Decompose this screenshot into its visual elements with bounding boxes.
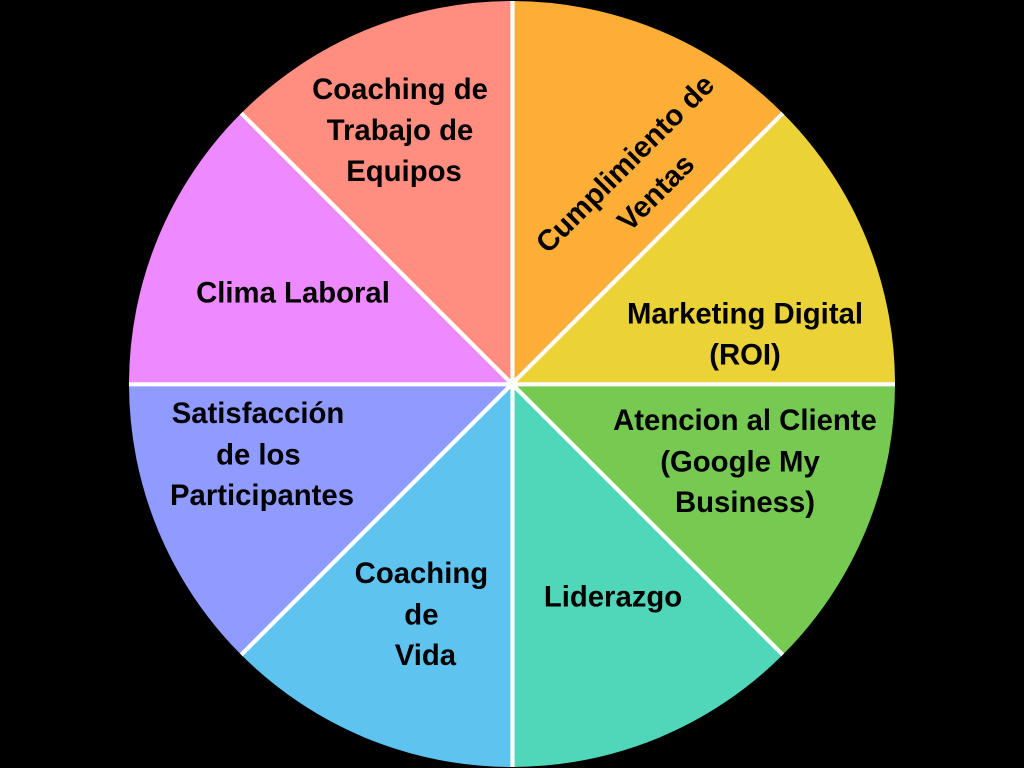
wedge: Atencion al Cliente — [512, 384, 895, 655]
label: Satisfaccion de los Participantes: Participantes — [170, 479, 354, 512]
wedge: Coaching de Vida — [241, 384, 512, 767]
label: Cumplimiento de Ventas: Cumplimiento de — [530, 68, 721, 260]
wheel diagram — [129, 1, 895, 767]
label: Atencion al Cliente (Google My Business): Atencion al Cliente — [613, 404, 877, 437]
wedge: Satisfaccion de los Participantes — [129, 384, 512, 655]
label: Coaching de Trabajo de Equipos: Equipos — [346, 155, 462, 188]
label: Coaching de Vida — [355, 557, 488, 672]
wedge: Cumplimiento de Ventas — [512, 1, 783, 384]
wedge: Clima Laboral — [129, 113, 512, 384]
label: Coaching de Trabajo de Equipos: Coaching de — [312, 73, 488, 106]
label: Atencion al Cliente (Google My Business): Business) — [675, 486, 815, 519]
label: Marketing Digital (ROI): Marketing Digital — [627, 298, 863, 331]
label: Satisfaccion de los Participantes: Satisfacción — [172, 397, 344, 430]
wedge: Coaching de Trabajo de Equipos — [241, 1, 512, 384]
wedge: Marketing Digital — [512, 113, 895, 384]
label: Coaching de Trabajo de Equipos: Trabajo de — [327, 114, 473, 147]
label: Clima Laboral: Clima Laboral — [196, 277, 390, 310]
label: Cumplimiento de Ventas: Ventas — [611, 148, 701, 238]
label: Liderazgo: Liderazgo — [544, 581, 682, 614]
label: Satisfaccion de los Participantes — [170, 397, 354, 512]
label: Coaching de Vida: Vida — [395, 639, 457, 672]
label: Coaching de Trabajo de Equipos — [312, 73, 488, 188]
label: Marketing Digital (ROI) — [627, 298, 863, 372]
label: Atencion al Cliente (Google My Business): (Google My — [660, 445, 820, 478]
label: Coaching de Vida: de — [404, 598, 439, 631]
label: Marketing Digital (ROI): (ROI) — [709, 339, 781, 372]
label: Coaching de Vida: Coaching — [355, 557, 488, 590]
label: Atencion al Cliente (Google My Business) — [613, 404, 877, 519]
label: Satisfaccion de los Participantes: de los — [216, 438, 301, 471]
wedge: Liderazgo — [512, 384, 783, 767]
